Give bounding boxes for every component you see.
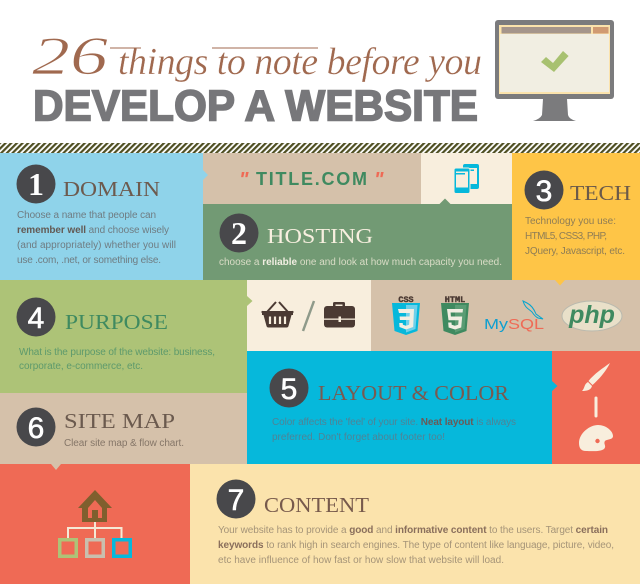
panel: 1 domain bbox=[0, 153, 208, 280]
heading: PURPOSE bbox=[65, 310, 168, 334]
number badge 4 bbox=[16, 298, 56, 336]
domain name text: " bbox=[239, 169, 249, 191]
icon: hierarchy connectors bbox=[68, 522, 122, 539]
heading: SITE MAP bbox=[64, 409, 175, 433]
number badge 1 bbox=[16, 164, 56, 204]
body text: corporate, e-commerce, etc. bbox=[19, 361, 143, 372]
icon: divider line bbox=[594, 396, 598, 418]
number badge 4: 4 bbox=[28, 302, 44, 335]
panel: 4 purpose bbox=[0, 280, 252, 393]
panel: 5 layout and color bbox=[247, 351, 558, 464]
body text: etc have influence of how fast or how slow that website will load. bbox=[218, 555, 504, 566]
body text bbox=[272, 417, 516, 443]
body text bbox=[525, 216, 625, 257]
panel: business icons bbox=[247, 280, 371, 351]
body text: Clear site map & flow chart. bbox=[64, 438, 184, 449]
body text: use .com, .net, or something else. bbox=[17, 255, 161, 266]
panel: 2 hosting bbox=[203, 198, 512, 280]
stripe band bbox=[0, 143, 640, 153]
logo: MySQL bbox=[484, 301, 544, 333]
number badge 7: 7 bbox=[228, 484, 244, 517]
icon: phones bbox=[454, 164, 479, 194]
script subtitle bbox=[32, 26, 482, 86]
logo: PHP: php bbox=[568, 301, 615, 329]
body text: Choose a name that people can bbox=[17, 210, 156, 221]
heading: HOSTING bbox=[267, 224, 373, 248]
main title: DEVELOP A WEBSITE bbox=[33, 82, 478, 130]
body text bbox=[19, 347, 215, 372]
heading: DOMAIN bbox=[63, 177, 160, 201]
panel: 7 content bbox=[190, 464, 640, 584]
body text: choose a reliable one and look at how much capacity you need. bbox=[219, 257, 502, 268]
panel: technology logos bbox=[371, 280, 640, 351]
number badge 6: 6 bbox=[28, 412, 44, 445]
icon: house bbox=[78, 490, 112, 522]
body text bbox=[218, 525, 614, 566]
number badge 2: 2 bbox=[231, 215, 247, 251]
icon: paintbrush bbox=[582, 363, 610, 391]
body text: keywords to rank high in search engines. The type of content like language, picture, video, bbox=[218, 540, 614, 551]
body text: Your website has to provide a good and informative content to the users. Target certain bbox=[218, 525, 608, 536]
header bbox=[32, 20, 614, 130]
logo: HTML5 bbox=[441, 295, 469, 335]
number badge 3: 3 bbox=[536, 175, 552, 208]
script subtitle: 26 bbox=[32, 26, 108, 86]
number badge 6 bbox=[16, 408, 56, 446]
body text: JQuery, Javascript, etc. bbox=[525, 246, 625, 257]
panel: title.com bbox=[203, 153, 421, 204]
panel: 6 site map bbox=[0, 393, 247, 470]
body text: HTML5, CSS3, PHP, bbox=[525, 231, 607, 242]
panel: 3 tech bbox=[512, 153, 640, 286]
panel: art icons bbox=[552, 351, 640, 464]
body text: Color affects the 'feel' of your site. Neat layout is always bbox=[272, 417, 516, 428]
number badge 1: 1 bbox=[28, 166, 44, 202]
panel: site map icon bbox=[0, 464, 190, 584]
icon: monitor with checkmark bbox=[495, 20, 614, 121]
body text: Technology you use: bbox=[525, 216, 616, 227]
script subtitle: things to note before you bbox=[118, 41, 482, 83]
body text bbox=[17, 210, 176, 266]
number badge 7 bbox=[216, 480, 256, 518]
body text: remember well and choose wisely bbox=[17, 225, 169, 236]
icon: site boxes bbox=[60, 540, 130, 556]
heading: CONTENT bbox=[264, 493, 369, 517]
logo: HTML5: HTML bbox=[445, 295, 465, 305]
body text: preferred. Don't forget about footer too! bbox=[272, 432, 445, 443]
icon: slash bbox=[303, 301, 314, 331]
heading: LAYOUT & COLOR bbox=[318, 381, 509, 405]
icon: palette bbox=[579, 425, 613, 451]
body text: What is the purpose of the website: business, bbox=[19, 347, 215, 358]
number badge 5 bbox=[270, 368, 308, 408]
heading: TECH bbox=[570, 181, 631, 205]
number badge 2 bbox=[220, 214, 258, 252]
logo: CSS3: CSS bbox=[398, 295, 414, 305]
icon: basket bbox=[261, 302, 294, 328]
icon: briefcase bbox=[324, 302, 355, 328]
logo: MySQL: My SQL bbox=[484, 316, 544, 333]
domain name text: TITLE.COM bbox=[256, 169, 367, 189]
domain name text bbox=[239, 169, 384, 191]
logo: CSS3 bbox=[392, 295, 420, 335]
body text: (and appropriately) whether you will bbox=[17, 240, 176, 251]
panel: mobile icon bbox=[421, 153, 512, 204]
domain name text: " bbox=[374, 169, 384, 191]
number badge 5: 5 bbox=[281, 373, 297, 406]
